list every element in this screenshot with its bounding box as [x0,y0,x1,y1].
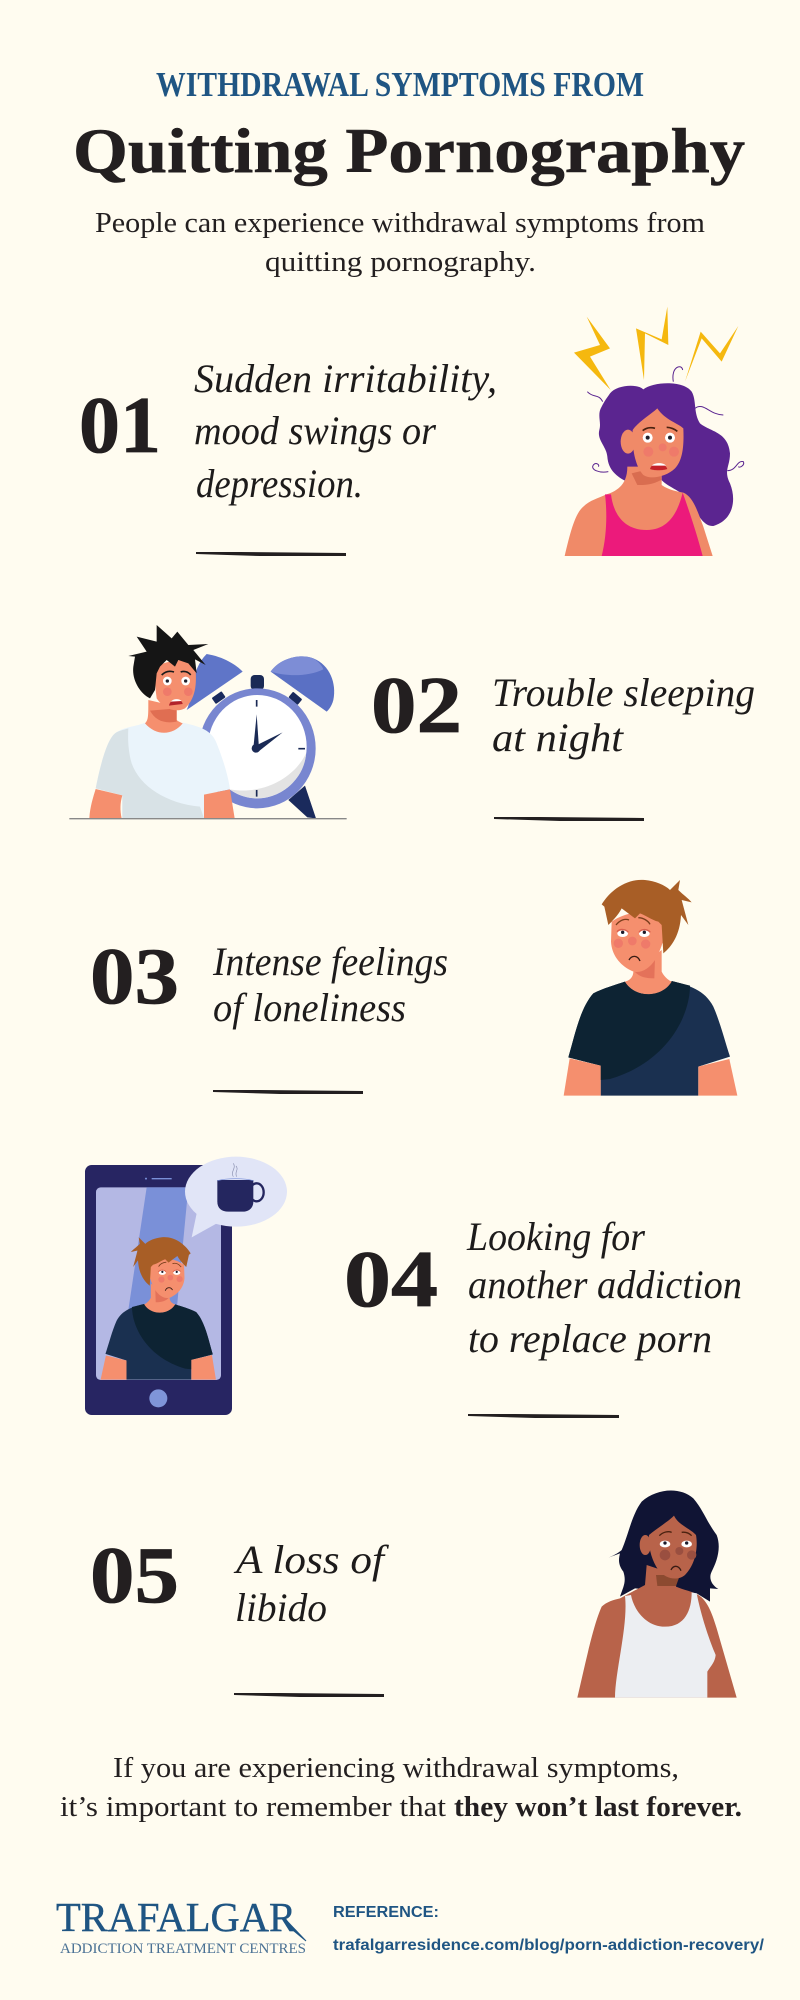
text: symptom 04 [466,1214,742,1361]
icon: phone with man and coffee bubble [85,1157,287,1415]
text: symptom 04: Looking for [466,1214,645,1259]
number 01: 01 [79,382,161,470]
text: symptom 02: at night [492,715,624,760]
reference url: trafalgarresidence.com/blog/porn-addiction-recovery/ [333,1937,765,1954]
panel: item 03 [90,880,737,1096]
closing text [60,1752,742,1823]
text: symptom 03: Intense feelings [212,939,448,984]
intro text: quitting pornography. [265,246,536,278]
text: symptom 04: to replace porn [468,1316,712,1361]
heading: kicker: WITHDRAWAL SYMPTOMS FROM [156,65,644,104]
panel: item 04 [85,1157,742,1418]
panel: item 05 [90,1491,737,1698]
text: symptom 02 [492,670,755,760]
icon: lonely man [564,880,737,1096]
text: symptom 01: mood swings or [194,408,436,453]
icon: worried man with alarm clock [69,625,347,819]
logo: Trafalgar: TRAFALGAR [56,1894,297,1940]
panel: item 01 [79,307,744,556]
text: symptom 03 [212,939,448,1030]
icon: irritated woman with lightning bolts [565,307,744,556]
text: symptom 05: A loss of [233,1537,389,1582]
text: symptom 02: Trouble sleeping [492,670,755,715]
panel: item 02 [69,625,755,821]
number 05: 05 [90,1532,179,1620]
text: symptom 01 [194,356,497,506]
number 04: 04 [344,1236,438,1324]
closing text: it’s important to remember that [60,1791,446,1823]
closing text: they won’t last forever. [454,1791,742,1823]
closing text: If you are experiencing withdrawal symptoms, [113,1752,679,1784]
title: Quitting Pornography [73,115,745,186]
text: symptom 03: of loneliness [213,985,406,1030]
underline stroke 03 [213,1090,363,1094]
text: symptom 01: Sudden irritability, [194,356,497,401]
reference label: REFERENCE: [333,1904,439,1921]
number 02: 02 [371,662,462,750]
icon: tired woman [577,1491,737,1698]
intro text [95,207,705,278]
underline stroke 02 [494,817,644,821]
number 03: 03 [90,933,179,1021]
underline stroke 01 [196,552,346,556]
text: symptom 05 [233,1537,389,1630]
underline stroke 04 [468,1414,619,1418]
text: symptom 01: depression. [196,461,363,506]
intro text: People can experience withdrawal symptoms from [95,207,705,239]
underline stroke 05 [234,1693,384,1697]
text: symptom 04: another addiction [468,1262,742,1307]
logo: Trafalgar: ADDICTION TREATMENT CENTRES [60,1941,306,1957]
text: symptom 05: libido [235,1585,327,1630]
